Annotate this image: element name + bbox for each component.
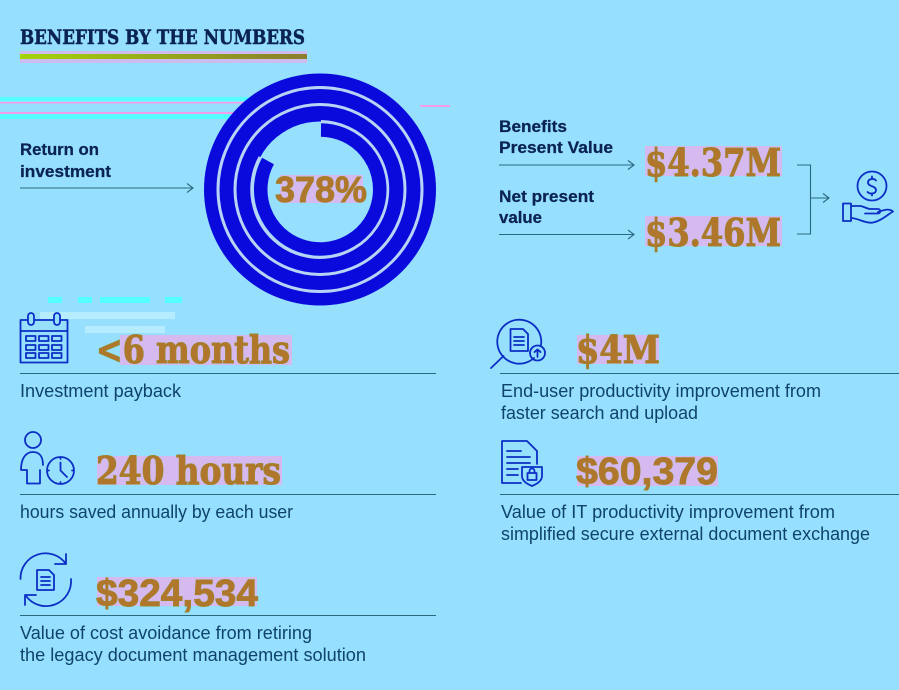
- divider: [20, 372, 436, 374]
- label: benefits present value: [499, 117, 613, 157]
- bracket arrow: [797, 165, 829, 234]
- text: IT productivity: [501, 502, 870, 544]
- arrow: return on investment: [20, 184, 193, 192]
- label: net present value: Net present: [499, 187, 594, 206]
- value: $3.46M: $3.46M: [645, 210, 781, 255]
- radial chart: 378%: [204, 74, 436, 306]
- text: cost avoidance: [20, 623, 366, 665]
- text: end-user productivity: End-user productivity improvement from: [501, 381, 821, 401]
- value: <6 months: <6 months: [96, 327, 290, 372]
- icon: document with lock shield: [502, 441, 542, 486]
- label: return on investment: investment: [20, 162, 111, 181]
- icon: person with clock: [21, 432, 74, 484]
- text: hours saved: hours saved annually by each user: [20, 502, 293, 522]
- text: investment payback: Investment payback: [20, 381, 182, 401]
- title: BENEFITS BY THE NUMBERS: [20, 25, 305, 49]
- text: cost avoidance: Value of cost avoidance from retiring: [20, 623, 312, 643]
- text: end-user productivity: [501, 381, 821, 423]
- value: $60,379: $60,379: [576, 451, 718, 493]
- value: 378%: 378%: [275, 169, 367, 210]
- label: net present value: [499, 187, 594, 227]
- text: end-user productivity: faster search and upload: [501, 403, 698, 423]
- icon: refresh document: [20, 553, 71, 606]
- icon: search document upload: [491, 320, 545, 368]
- divider: [500, 494, 899, 496]
- divider: [20, 614, 436, 616]
- arrow: benefits present value: [499, 160, 634, 170]
- icon: hand holding coin: [843, 172, 893, 223]
- divider: [500, 372, 899, 374]
- label: return on investment: Return on: [20, 140, 99, 159]
- value: $4M: $4M: [576, 327, 660, 372]
- title: [20, 25, 307, 63]
- text: IT productivity: simplified secure external document exchange: [501, 524, 870, 544]
- label: benefits present value: Present Value: [499, 138, 613, 157]
- label: benefits present value: Benefits: [499, 117, 567, 136]
- value: $4.37M: $4.37M: [645, 140, 781, 185]
- text: cost avoidance: the legacy document management solution: [20, 645, 366, 665]
- label: net present value: value: [499, 208, 542, 227]
- value: $324,534: $324,534: [96, 573, 258, 615]
- text: IT productivity: Value of IT productivity improvement from: [501, 502, 835, 522]
- divider: [20, 494, 436, 496]
- value: 240 hours: 240 hours: [96, 448, 281, 493]
- icon: calendar: [20, 313, 68, 362]
- label: return on investment: [20, 140, 111, 181]
- arrow: net present value: [499, 230, 634, 239]
